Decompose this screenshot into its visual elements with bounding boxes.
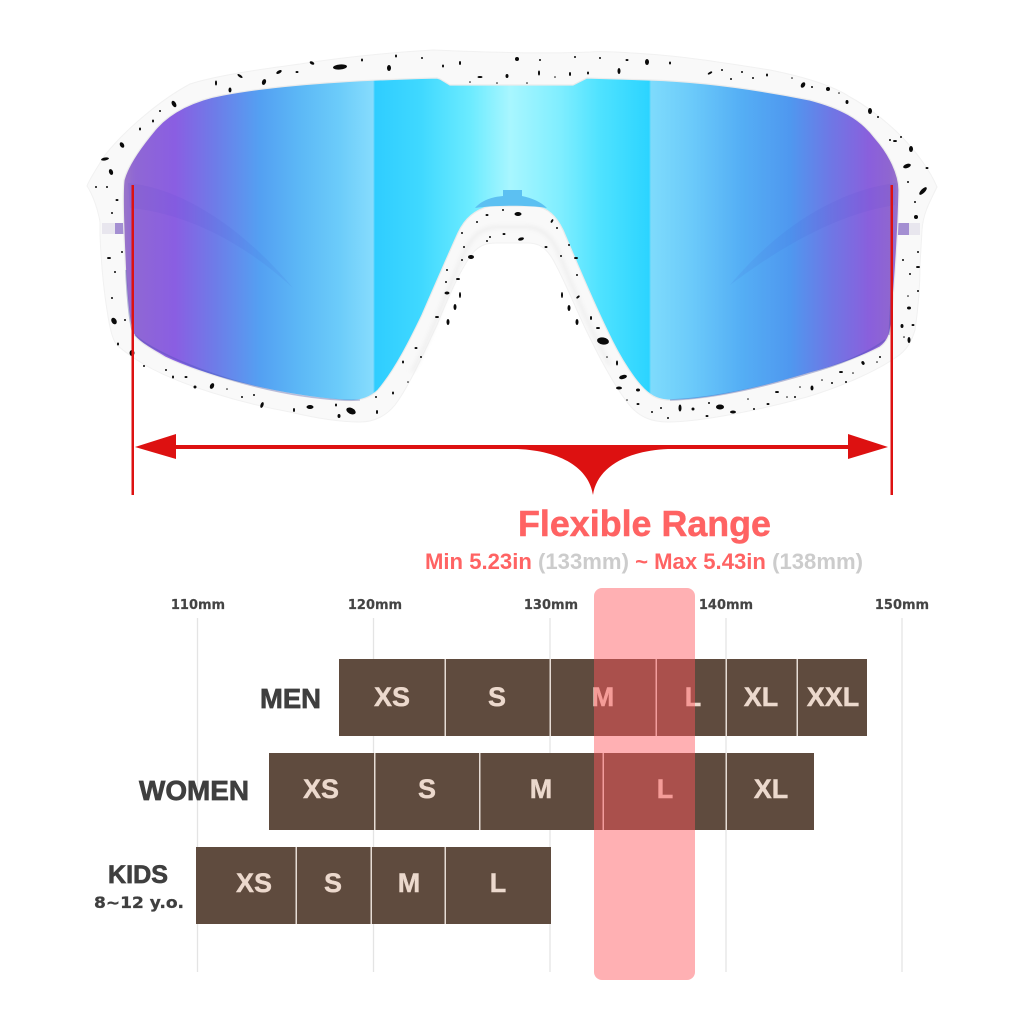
label: kids: KIDS (108, 861, 168, 889)
hinge lens tabs (115, 223, 909, 235)
red dimension marker (132, 185, 893, 495)
right measure line (890, 185, 893, 495)
heading: Flexible Range (518, 503, 771, 544)
kids size labels (236, 868, 506, 898)
size chart axis (171, 598, 929, 972)
label: men: MEN (260, 683, 321, 714)
women size labels (303, 774, 788, 804)
lens temple shadow left (128, 183, 293, 288)
axis labels: 140mm (699, 598, 753, 613)
kids size labels: M (398, 868, 420, 898)
axis labels: 130mm (524, 598, 578, 613)
men size labels (374, 682, 859, 712)
men size labels: M (592, 682, 614, 712)
men size labels: S (488, 682, 506, 712)
sunglasses illustration (87, 50, 937, 422)
men size labels: XS (374, 682, 410, 712)
men size labels: L (685, 682, 701, 712)
kids size labels: S (324, 868, 342, 898)
range subheading: Min 5.23in (133mm) ~ Max 5.43in (138mm) (425, 549, 863, 574)
women size labels: XS (303, 774, 339, 804)
lens (123, 78, 899, 401)
row: women (139, 753, 814, 830)
kids size bars (196, 847, 551, 924)
hinge gaps (102, 223, 920, 235)
label: kids age: 8~12 y.o. (94, 893, 184, 912)
men size labels: XL (744, 682, 778, 712)
frame nose ridge (412, 227, 610, 372)
women size labels: L (657, 774, 673, 804)
left measure line (132, 185, 134, 495)
width arrow with brace (135, 434, 888, 495)
women size labels: S (418, 774, 436, 804)
axis labels (171, 598, 929, 613)
axis labels: 120mm (348, 598, 402, 613)
women size labels: M (530, 774, 552, 804)
women size labels: XL (754, 774, 788, 804)
row: men (260, 659, 867, 736)
label: women: WOMEN (139, 775, 249, 806)
women size bars (269, 753, 814, 830)
kids size labels: XS (236, 868, 272, 898)
men size bars (339, 659, 867, 736)
lens temple shadow right (730, 183, 896, 285)
flexible range highlight band (594, 588, 695, 980)
axis labels: 110mm (171, 598, 225, 613)
kids size labels: L (490, 868, 506, 898)
frame speckles (95, 54, 928, 419)
lens lower edge shade (126, 270, 892, 400)
frame (87, 50, 937, 422)
nose pad (475, 190, 547, 208)
row: kids (94, 847, 551, 924)
axis labels: 150mm (875, 598, 929, 613)
men size labels: XXL (807, 682, 859, 712)
